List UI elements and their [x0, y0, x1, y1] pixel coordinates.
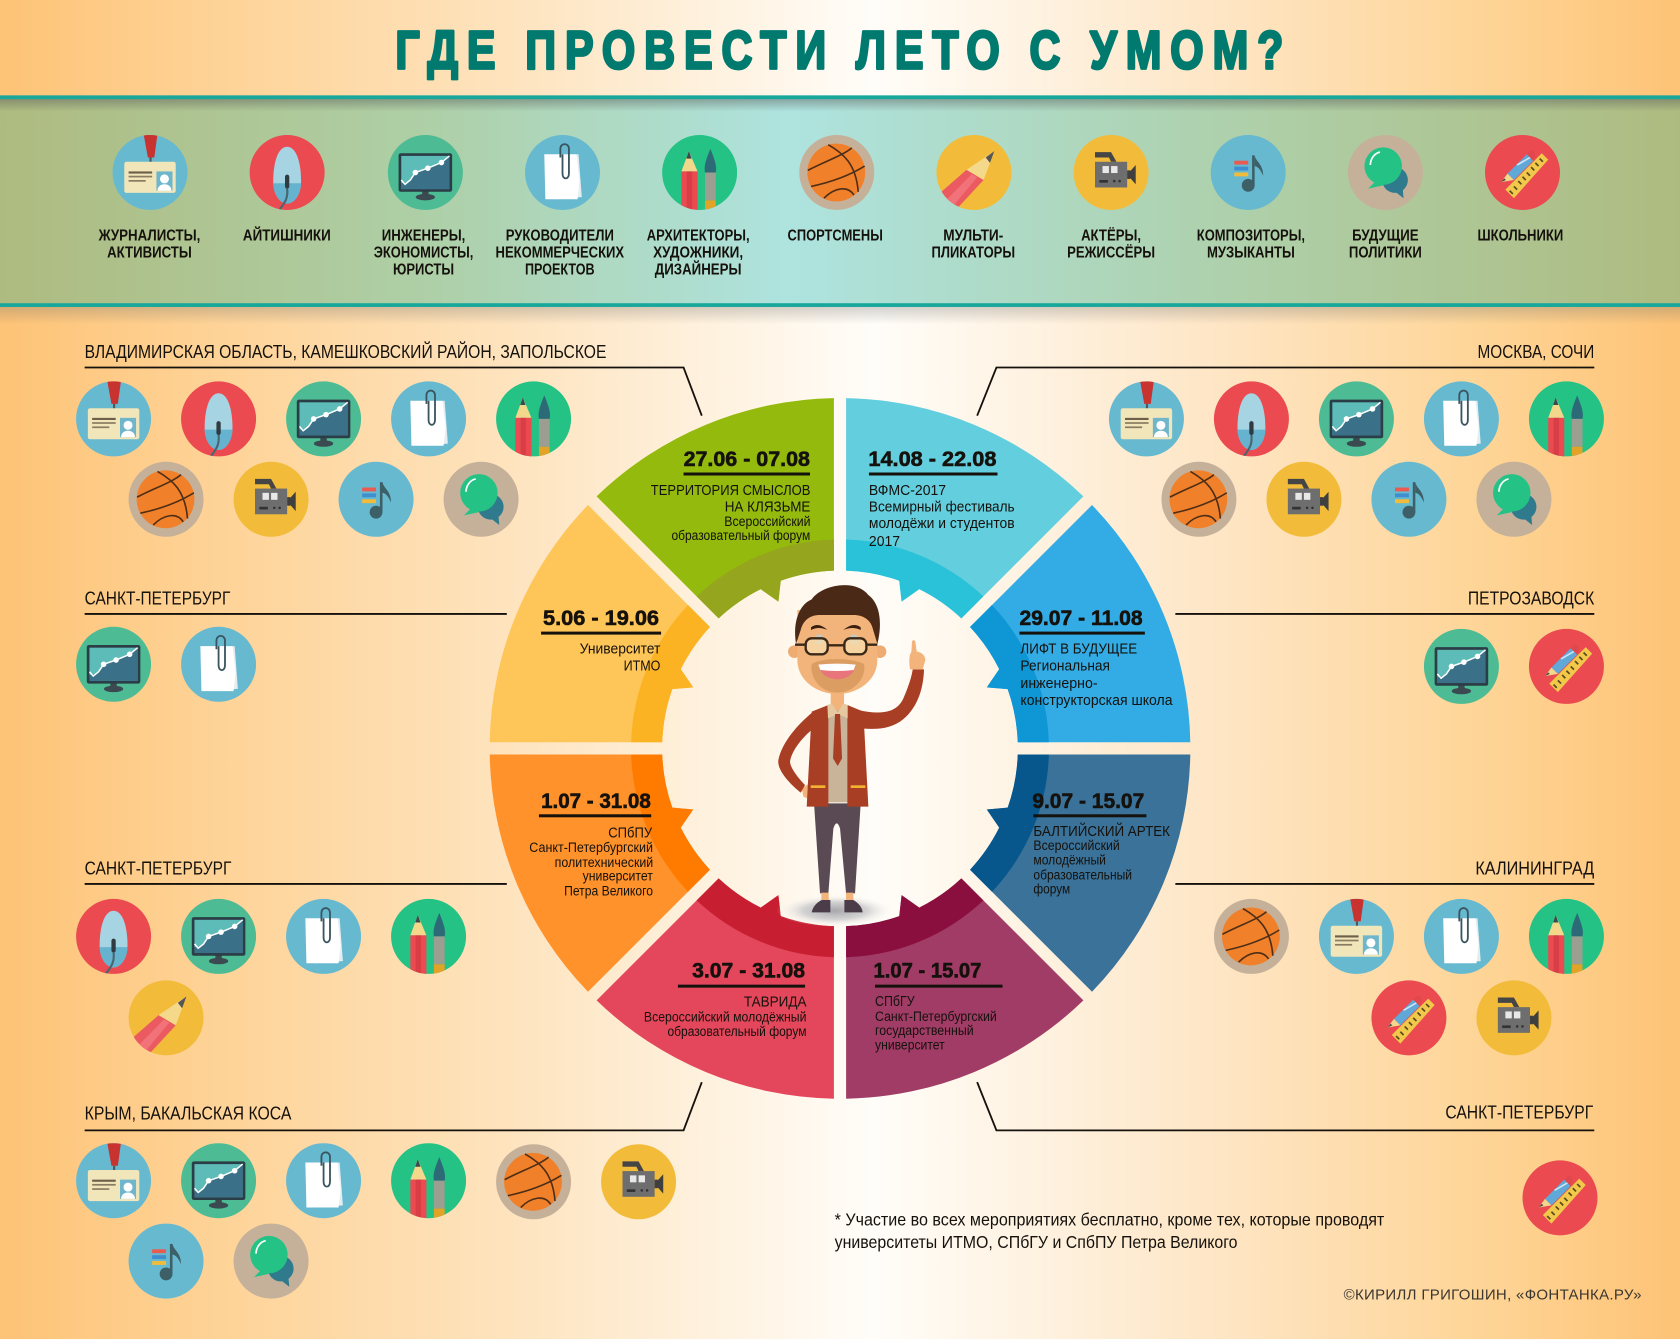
segment: SPbPU: Санкт-Петербургский — [529, 840, 653, 855]
region: Saint Petersburg (SPbPU): САНКТ-ПЕТЕРБУРГ — [85, 858, 232, 878]
region: Saint Petersburg (ITMO) — [76, 588, 507, 702]
region: Saint Petersburg (ITMO): САНКТ-ПЕТЕРБУРГ — [85, 588, 230, 608]
profession: actors — [1067, 135, 1155, 261]
profession: athletes: СПОРТСМЕНЫ — [788, 228, 883, 245]
profession: architects — [647, 135, 750, 278]
segment: ITMO: 5.06 - 19.06 — [543, 606, 659, 630]
segment: Lift: ЛИФТ В БУДУЩЕЕ — [1020, 642, 1138, 658]
region: Vladimir oblast: ВЛАДИМИРСКАЯ ОБЛАСТЬ, КАМЕШКОВСКИЙ РАЙОН, ЗАПОЛЬСКОЕ — [85, 341, 606, 362]
segment: Tavrida: Всероссийский молодёжный — [644, 1010, 806, 1025]
segment: VFMS — [846, 398, 1083, 618]
segment: Baltic Artek: молодёжный — [1033, 853, 1106, 868]
profession: NGO leaders: ПРОЕКТОВ — [525, 261, 595, 278]
profession: journalists — [98, 134, 200, 261]
segment: SPbGU: Санкт-Петербургский — [875, 1009, 997, 1024]
band of professions — [0, 95, 1680, 324]
profession: engineers — [374, 135, 473, 278]
profession: engineers: ИНЖЕНЕРЫ, — [382, 228, 465, 245]
segment: SPbGU: университет — [875, 1037, 945, 1052]
segment: Territoria: образовательный форум — [671, 528, 810, 543]
title: ГДЕ ПРОВЕСТИ ЛЕТО С УМОМ? — [395, 21, 1283, 81]
segment: Lift — [970, 505, 1190, 742]
profession: animators: ПЛИКАТОРЫ — [932, 244, 1015, 261]
segment: SPbPU: Петра Великого — [564, 884, 653, 899]
profession: IT — [243, 135, 331, 245]
segment: Baltic Artek: 9.07 - 15.07 — [1032, 789, 1144, 813]
profession: athletes — [788, 135, 883, 245]
segment: Territoria: НА КЛЯЗЬМЕ — [725, 500, 811, 516]
segment: Lift: 29.07 - 11.08 — [1019, 606, 1143, 630]
segment: Baltic Artek: Всероссийский — [1033, 838, 1120, 853]
segment: SPbPU: 1.07 - 31.08 — [541, 789, 651, 813]
profession: journalists: ЖУРНАЛИСТЫ, — [98, 228, 200, 245]
profession: actors: РЕЖИССЁРЫ — [1067, 244, 1155, 261]
footnote — [835, 1210, 1384, 1252]
segment: SPbPU: СПбПУ — [608, 826, 653, 842]
footnote: университеты ИТМО, СПбГУ и СпбПУ Петра Великого — [835, 1232, 1238, 1252]
region: Vladimir oblast — [76, 341, 702, 537]
segment: VFMS: 14.08 - 22.08 — [868, 447, 997, 471]
segment: Lift: конструкторская школа — [1020, 693, 1174, 709]
segment: Baltic Artek — [970, 754, 1190, 992]
region: Saint Petersburg (SPbPU) — [76, 858, 507, 1055]
profession: schoolchildren: ШКОЛЬНИКИ — [1478, 228, 1563, 245]
segment: SPbGU: государственный — [875, 1023, 974, 1038]
profession: composers: МУЗЫКАНТЫ — [1207, 244, 1295, 261]
profession: politicians — [1348, 135, 1423, 261]
segment: ITMO: Университет — [580, 641, 661, 657]
profession: architects: АРХИТЕКТОРЫ, — [647, 228, 750, 245]
region: Crimea — [76, 1082, 702, 1299]
ring chart — [490, 398, 1190, 1099]
segment: VFMS: молодёжи и студентов — [869, 516, 1015, 532]
segment: Territoria — [597, 398, 834, 618]
profession: architects: ДИЗАЙНЕРЫ — [655, 260, 742, 278]
footnote: * Участие во всех мероприятиях бесплатно, кроме тех, которые проводят — [835, 1210, 1384, 1230]
segment: Lift: Региональная — [1020, 659, 1110, 675]
profession: engineers: ЮРИСТЫ — [393, 261, 454, 278]
profession: politicians: ПОЛИТИКИ — [1349, 244, 1422, 261]
segment: SPbPU — [490, 754, 710, 992]
profession: IT: АЙТИШНИКИ — [243, 227, 331, 245]
segment: Tavrida — [597, 878, 834, 1099]
region: Saint Petersburg (SPbGU): САНКТ-ПЕТЕРБУРГ — [1445, 1103, 1593, 1123]
segment: Territoria: 27.06 - 07.08 — [684, 447, 810, 471]
profession: politicians: БУДУЩИЕ — [1352, 228, 1419, 245]
profession: NGO leaders: НЕКОММЕРЧЕСКИХ — [496, 244, 625, 261]
segment: Baltic Artek: образовательный — [1033, 867, 1132, 882]
segment: Tavrida: образовательный форум — [668, 1024, 806, 1039]
character: man in glasses — [777, 585, 925, 927]
profession: composers — [1197, 135, 1305, 261]
profession: engineers: ЭКОНОМИСТЫ, — [374, 244, 473, 261]
segment: VFMS: 2017 — [869, 534, 900, 550]
segment: SPbGU: СПбГУ — [875, 994, 915, 1010]
bottom edge — [0, 1339, 1680, 1341]
segment: Territoria: Всероссийский — [724, 514, 811, 529]
segment: SPbPU: университет — [583, 869, 653, 884]
profession: journalists: АКТИВИСТЫ — [107, 244, 192, 261]
profession: composers: КОМПОЗИТОРЫ, — [1197, 228, 1305, 245]
region: Moscow, Sochi: МОСКВА, СОЧИ — [1478, 342, 1594, 362]
region: Crimea: КРЫМ, БАКАЛЬСКАЯ КОСА — [85, 1104, 292, 1124]
region: Petrozavodsk — [1175, 588, 1604, 704]
segment: Territoria: ТЕРРИТОРИЯ СМЫСЛОВ — [651, 483, 810, 499]
profession: NGO leaders — [496, 135, 625, 278]
region: Saint Petersburg (SPbGU) — [977, 1082, 1598, 1235]
region: Kaliningrad — [1175, 858, 1604, 1055]
profession: schoolchildren — [1478, 135, 1563, 245]
profession: architects: ХУДОЖНИКИ, — [653, 244, 743, 261]
segment: ITMO — [490, 505, 710, 742]
segment: Tavrida: 3.07 - 31.08 — [692, 958, 805, 982]
segment: Baltic Artek: форум — [1033, 882, 1070, 897]
region: Petrozavodsk: ПЕТРОЗАВОДСК — [1468, 588, 1595, 608]
segment: SPbGU: 1.07 - 15.07 — [874, 958, 981, 982]
profession: NGO leaders: РУКОВОДИТЕЛИ — [506, 228, 614, 245]
segment: SPbGU — [846, 878, 1083, 1099]
profession: actors: АКТЁРЫ, — [1081, 228, 1141, 245]
region: Kaliningrad: КАЛИНИНГРАД — [1475, 858, 1594, 878]
region: Moscow, Sochi — [977, 342, 1604, 537]
profession: animators: МУЛЬТИ- — [943, 228, 1003, 245]
profession: animators — [932, 135, 1015, 261]
segment: VFMS: Всемирный фестиваль — [869, 500, 1015, 516]
segment: ITMO: ИТМО — [624, 659, 660, 675]
segment: Tavrida: ТАВРИДА — [744, 995, 807, 1011]
segment: VFMS: ВФМС-2017 — [869, 483, 946, 499]
segment: SPbPU: политехнический — [555, 855, 653, 870]
segment: Lift: инженерно- — [1020, 676, 1098, 692]
segment: Baltic Artek: БАЛТИЙСКИЙ АРТЕК — [1033, 822, 1171, 840]
credit: ©КИРИЛЛ ГРИГОШИН, «ФОНТАНКА.РУ» — [1344, 1287, 1641, 1304]
